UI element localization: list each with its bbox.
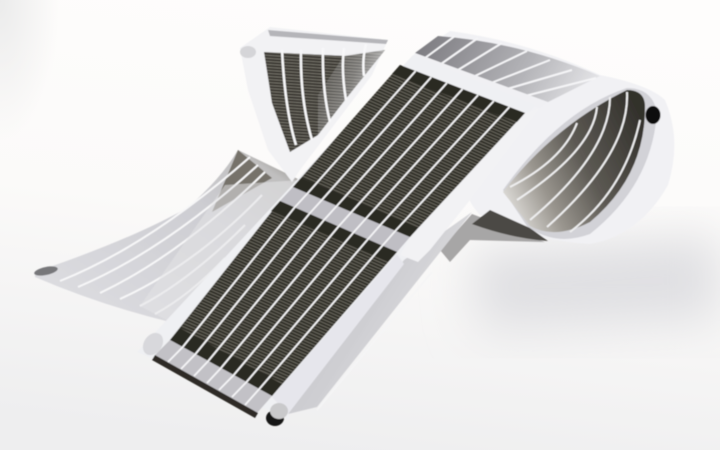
roll: back top gray cells	[415, 36, 600, 102]
icon: black eyelet	[646, 106, 660, 124]
roll: inner ring	[503, 88, 657, 239]
front panel: upper cells	[293, 65, 525, 237]
icon: bottom rivet	[266, 403, 288, 426]
roll: inner cells	[503, 90, 645, 232]
strip right of lower panel	[272, 254, 404, 414]
icon: left sheet eyelet	[33, 265, 59, 277]
film shadow wedge	[288, 212, 472, 414]
roll: underside	[440, 214, 545, 262]
front panel: lower cells	[170, 201, 397, 396]
transparent film under front panels	[137, 55, 535, 420]
white tab	[400, 108, 540, 262]
strip lines	[168, 71, 509, 405]
bottom small pads	[152, 355, 258, 418]
band between panels	[280, 187, 410, 252]
white film line	[317, 272, 432, 410]
icon: left rivet	[139, 329, 167, 359]
roll: film around curl	[395, 31, 674, 262]
contact pads	[170, 65, 525, 396]
back upper panel	[240, 27, 388, 182]
icon: upper eyelet	[240, 46, 256, 58]
back left sheet	[33, 150, 300, 322]
bottom gray band	[155, 340, 272, 413]
